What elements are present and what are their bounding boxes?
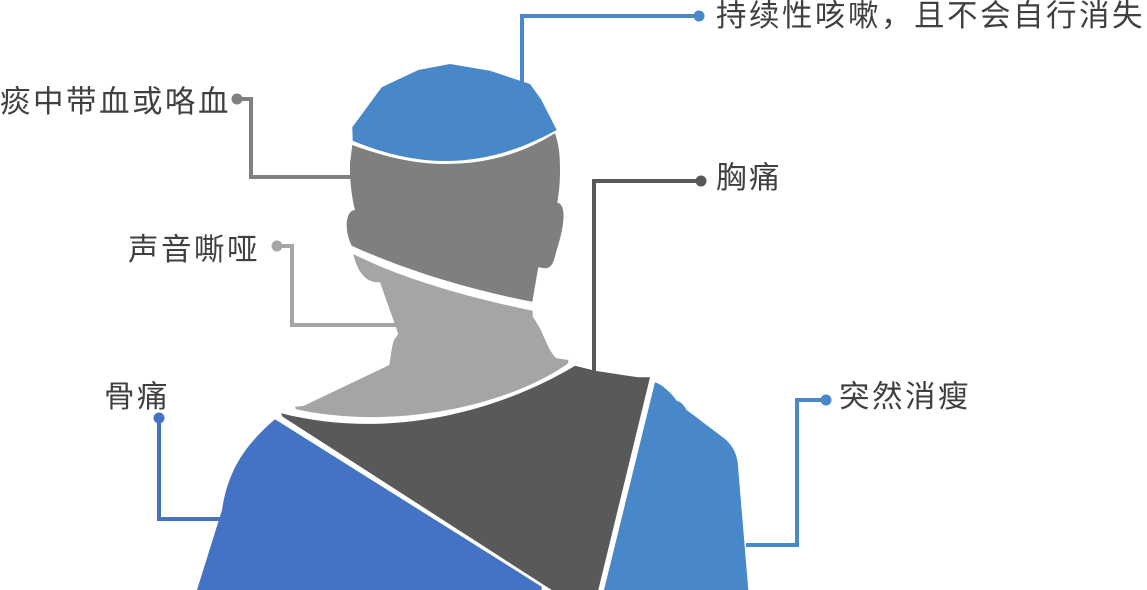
callout: hoarseness: 声音嘶哑: [128, 233, 260, 267]
callout: persistent cough: 持续性咳嗽，且不会自行消失: [716, 0, 1145, 33]
callout: persistent cough: [522, 0, 1145, 84]
callout: bone pain: 骨痛: [104, 380, 170, 414]
head middle segment: [347, 133, 564, 302]
callout: sudden weight loss: 突然消瘦: [839, 380, 971, 414]
neck segment: [295, 254, 568, 417]
right shoulder segment: [604, 382, 748, 590]
callout: blood in sputum: [0, 85, 351, 177]
callout: chest pain: [594, 161, 782, 371]
callout: blood in sputum: 痰中带血或咯血: [0, 85, 231, 119]
callout: chest pain: 胸痛: [716, 161, 782, 195]
chest segment: [281, 366, 650, 590]
callout: hoarseness: [128, 233, 397, 325]
callout: sudden weight loss: [746, 380, 971, 545]
head top segment: [352, 64, 557, 161]
left shoulder segment: [197, 419, 542, 590]
callout: bone pain: [104, 380, 222, 519]
